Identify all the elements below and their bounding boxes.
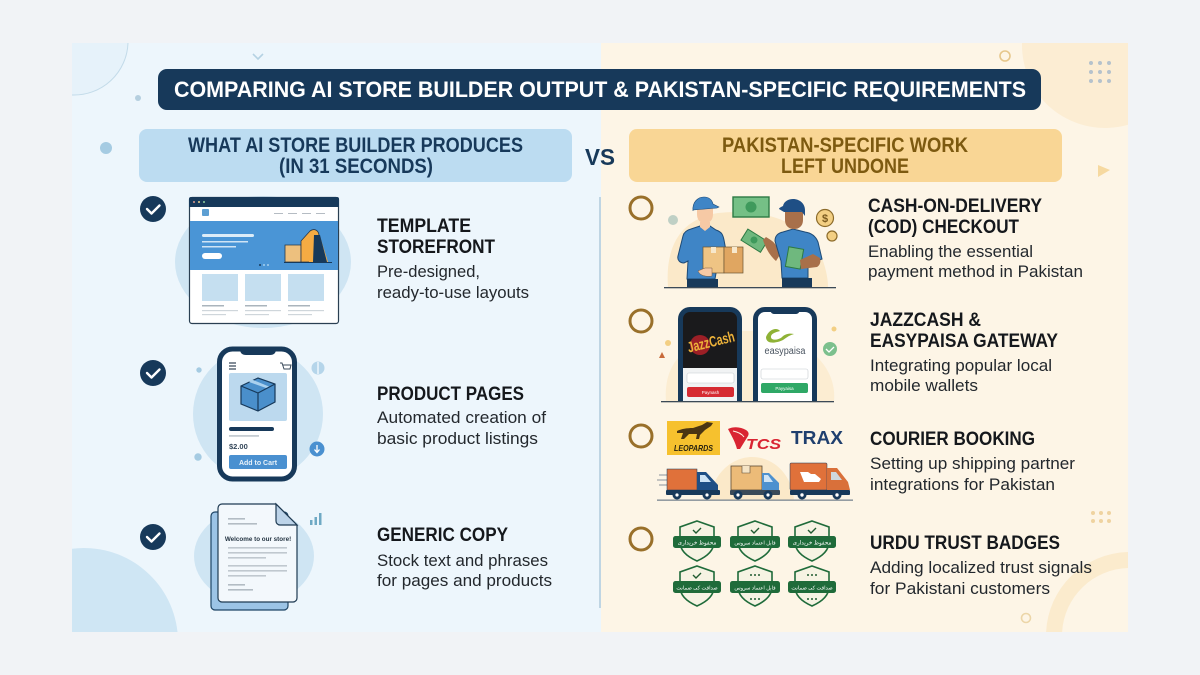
text: template storefront [377,216,529,302]
illustration: storefront browser [175,196,351,328]
text: template storefront: STOREFRONT [377,237,495,258]
badge 5 [730,566,780,606]
right header: PAKISTAN-SPECIFIC WORK [722,134,968,157]
text: courier [870,429,1076,494]
vs label: VS [585,144,615,170]
text: generic copy: GENERIC COPY [377,525,508,546]
badge 2: قابل اعتماد سروس [734,540,776,546]
left header: WHAT AI STORE BUILDER PRODUCES [188,134,523,157]
illustration: document stack: Welcome to our store! [225,536,291,543]
text: cod [868,196,1083,281]
text: wallets: mobile wallets [870,377,978,395]
text: generic copy: for pages and products [377,572,552,590]
illustration: courier logos and trucks: LEOPARDS [674,443,713,453]
badge 1: محفوظ خریداری [678,540,716,546]
text: product pages: basic product listings [377,430,538,448]
text: urdu badges: URDU TRUST BADGES [870,533,1060,554]
illustration: wallet phones: JazzCash [686,328,736,357]
ring icon: cod [630,197,652,219]
badge 4: صداقت کی ضمانت [676,586,718,592]
text: template storefront: TEMPLATE [377,216,471,237]
badge 1 [673,521,721,561]
ring icon: wallets [630,310,652,332]
illustration: product phone [193,347,324,480]
text: wallets: EASYPAISA GATEWAY [870,331,1058,352]
text: cod: payment method in Pakistan [868,263,1083,281]
text: urdu badges: for Pakistani customers [870,580,1050,598]
check icon: product pages [140,360,166,386]
text: courier: integrations for Pakistan [870,476,1055,494]
right header [629,129,1062,182]
illustration: wallet phones [659,307,837,402]
illustration: courier logos and trucks: TCS [746,436,781,453]
badge 5: قابل اعتماد سروس [734,586,776,592]
illustration: courier logos and trucks [657,421,853,501]
illustration: document stack [194,504,322,610]
illustration: cash on delivery [664,197,837,288]
illustration: wallet phones: easypaisa [764,346,806,357]
text: template storefront: ready-to-use layouts [377,284,529,302]
ring icon: courier [630,425,652,447]
text: cod: (COD) CHECKOUT [868,217,1019,238]
illustration: wallet phones: Payyaisa [775,386,794,391]
left header [139,129,572,182]
text: courier: Setting up shipping partner [870,455,1076,473]
check icon: generic copy [140,524,166,550]
ring icon: urdu badges [630,528,652,550]
title [158,69,1041,110]
text: urdu badges [870,533,1092,598]
text: generic copy [377,525,552,590]
title: COMPARING AI STORE BUILDER OUTPUT & PAKISTAN-SPECIFIC REQUIREMENTS [174,77,1026,102]
right header: LEFT UNDONE [781,155,909,178]
background panels [72,43,1128,632]
badge 3 [788,521,836,561]
text: cod: Enabling the essential [868,243,1033,261]
text: urdu badges: Adding localized trust signals [870,559,1092,577]
badge 3: محفوظ خریداری [793,540,831,546]
text: template storefront: Pre-designed, [377,263,480,281]
text: cod: CASH-ON-DELIVERY [868,196,1042,217]
badge 4 [673,566,721,606]
text: generic copy: Stock text and phrases [377,552,548,570]
text: courier: COURIER BOOKING [870,429,1035,450]
text: wallets: JAZZCASH & [870,310,981,331]
badge 6: صداقت کی ضمانت [791,586,833,592]
badge 2 [730,521,780,561]
illustration: wallet phones: Paynash [702,390,720,395]
text: product pages: Automated creation of [377,409,546,427]
illustration: urdu trust badges [673,521,836,606]
badge 6 [788,566,836,606]
illustration: cash on delivery: $ [822,213,828,225]
text: wallets [870,310,1058,395]
left header: (IN 31 SECONDS) [279,155,433,178]
illustration: product phone: Add to Cart [239,460,278,467]
illustration: courier logos and trucks: TRAX [791,428,843,448]
check icon: template storefront [140,196,166,222]
text: wallets: Integrating popular local [870,357,1052,375]
text: product pages: PRODUCT PAGES [377,384,524,405]
illustration: product phone: $2.00 [229,442,248,451]
text: product pages [377,384,546,448]
